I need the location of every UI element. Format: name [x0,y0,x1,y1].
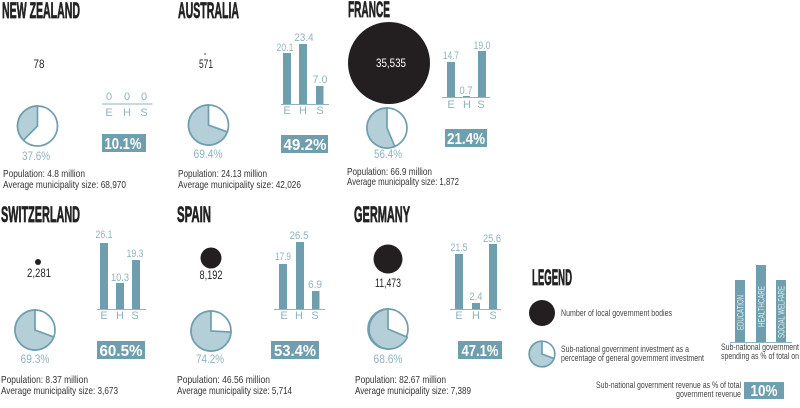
bar chart: Germany: H [472,310,480,322]
bar chart: France: H [463,99,471,111]
population text: France: Average municipality size: 1,872 [347,176,459,188]
legend text: pie meaning: percentage of general government investment [561,353,704,364]
revenue badge: New Zealand: 10.1% [104,136,142,153]
panel: Switzerland [1,202,146,397]
panel: Australia [178,0,329,191]
population text: Switzerland [1,374,118,397]
population text: Switzerland: Average municipality size: 3,673 [1,385,118,397]
bar chart: Germany: 2.4 [470,291,482,303]
pie chart: Australia 69.4% [188,105,228,145]
count of local bodies: New Zealand: 78 [34,57,45,71]
pie chart: Switzerland 69.3% [15,310,55,350]
revenue badge: Australia: 49.2% [284,137,327,154]
bar chart: Switzerland [96,229,146,322]
bar chart: New Zealand: H [123,107,131,119]
bar chart: Switzerland: H [116,310,124,322]
bar chart: Switzerland: 10.3 [111,272,129,284]
population text: New Zealand: Population: 4.8 million [3,168,85,180]
bar chart: France: 14.7 [443,50,459,62]
bar chart: France: 0.7 [460,85,472,97]
revenue badge: Switzerland: 60.5% [100,343,143,360]
legend text: badge meaning [596,380,741,400]
legend text: circle meaning: Number of local government bodies [561,308,672,319]
count of local bodies: Australia [199,53,213,71]
revenue badge: Spain: 53.4% [274,343,316,360]
pie label: France: 56.4% [374,149,402,161]
legend text: badge meaning: Sub-national government revenue as % of total [596,380,741,391]
bar chart: Australia: 20.1 [276,42,294,54]
count of local bodies: Germany: 11,473 [375,276,401,290]
bar chart: Germany: 25.6 [483,233,501,245]
bar chart: Spain [274,230,325,322]
bar chart: New Zealand: 0 [106,91,112,103]
pie label: New Zealand: 37.6% [22,151,50,163]
bar chart: France: 19.0 [474,40,490,52]
pie chart: Germany 68.6% [368,309,408,349]
count of local bodies: Spain: 8,192 [200,268,223,282]
population text: Australia: Population: 24.13 million [178,168,267,180]
population text: New Zealand [3,168,126,191]
pie chart: Spain 74.2% [191,311,231,351]
population text: Germany: Average municipality size: 7,389 [355,385,471,397]
panel: Germany: GERMANY [354,202,410,227]
legend badge: 10% [750,383,778,400]
pie label: Spain: 74.2% [196,354,224,366]
population text: Germany [355,374,471,397]
count of local bodies: France [348,22,430,104]
population text: Australia: Average municipality size: 42,026 [178,179,301,191]
legend bar chart: SOCIAL WELFARE [776,286,786,338]
pie label: Australia: 69.4% [194,149,222,161]
pie chart: France 56.4% [367,108,407,148]
legend text: pie meaning [561,344,704,364]
bar chart: Switzerland: S [131,310,139,322]
population text: Spain [177,374,292,397]
population text: Spain: Population: 46.56 million [177,374,270,386]
legend text: pie meaning: Sub-national government investment as a [561,344,690,355]
bar chart: Australia: 23.4 [294,32,314,44]
bar chart: Switzerland: E [100,310,108,322]
bar chart: Australia: S [316,105,324,117]
bar chart: New Zealand: 0 [124,91,130,103]
heading: Spain: SPAIN [177,202,211,227]
bar chart: New Zealand [102,91,152,119]
panel: legend [529,265,799,400]
bar chart: Australia: E [283,105,291,117]
revenue badge: Germany: 47.1% [462,343,499,360]
population text: New Zealand: Average municipality size: 68,970 [3,179,126,191]
bar chart: Australia: 7.0 [312,74,328,86]
pie label: Germany: 68.6% [374,354,402,366]
legend bar chart: HEALTHCARE [756,286,766,327]
population text: Switzerland: Population: 8.37 million [1,374,88,386]
bar chart: Germany: S [489,310,497,322]
bar chart: Germany: E [455,310,463,322]
panel: Germany [354,202,502,397]
legend text: badge meaning: government revenue [676,389,741,400]
bar chart: France [442,40,490,111]
bar chart: Switzerland: 26.1 [96,229,112,241]
bar chart: New Zealand: E [105,107,113,119]
count of local bodies: Australia: 571 [199,57,213,71]
legend icon: pie [529,341,555,367]
count of local bodies: Switzerland: 2,281 [27,266,51,280]
panel: legend: LEGEND [532,265,572,290]
bar chart: France: E [447,99,455,111]
bar chart: France: S [477,99,485,111]
legend bar chart: EDUCATION [736,295,746,330]
pie chart: New Zealand 37.6% [18,106,58,146]
population text: Australia [178,168,301,191]
population text: Spain: Average municipality size: 5,714 [177,385,292,397]
bar chart: Germany: 21.5 [450,242,468,254]
bar chart: New Zealand: S [140,107,148,119]
population text: France [347,166,459,188]
bar chart: Australia: H [299,105,307,117]
bar chart: Australia [276,32,329,117]
count of local bodies: France: 35,535 [376,56,406,70]
bar chart: Spain: S [311,310,319,322]
panel: France [347,0,490,188]
bar chart: Germany [450,233,501,322]
count of local bodies: Switzerland [27,259,51,280]
population text: France: Population: 66.9 million [347,166,432,178]
panel: New Zealand [2,0,152,191]
bar chart: Spain: E [280,310,288,322]
count of local bodies: Spain [200,248,223,282]
panel: Switzerland: SWITZERLAND [1,202,80,227]
legend text: bar meaning [721,342,799,362]
panel: Spain [177,202,325,397]
pie label: Switzerland: 69.3% [20,354,50,366]
revenue badge: France: 21.4% [447,131,485,148]
bar chart: New Zealand: 0 [141,91,147,103]
legend bar chart [730,265,792,342]
bar chart: Spain: 6.9 [308,279,322,291]
bar chart: Spain: 26.5 [290,230,308,242]
legend icon: black circle [529,300,555,326]
bar chart: Spain: H [295,310,303,322]
bar chart: Switzerland: 19.3 [126,248,144,260]
bar chart: Spain: 17.9 [275,251,291,263]
count of local bodies: Germany [374,244,402,290]
population text: Germany: Population: 82.67 million [355,374,446,386]
